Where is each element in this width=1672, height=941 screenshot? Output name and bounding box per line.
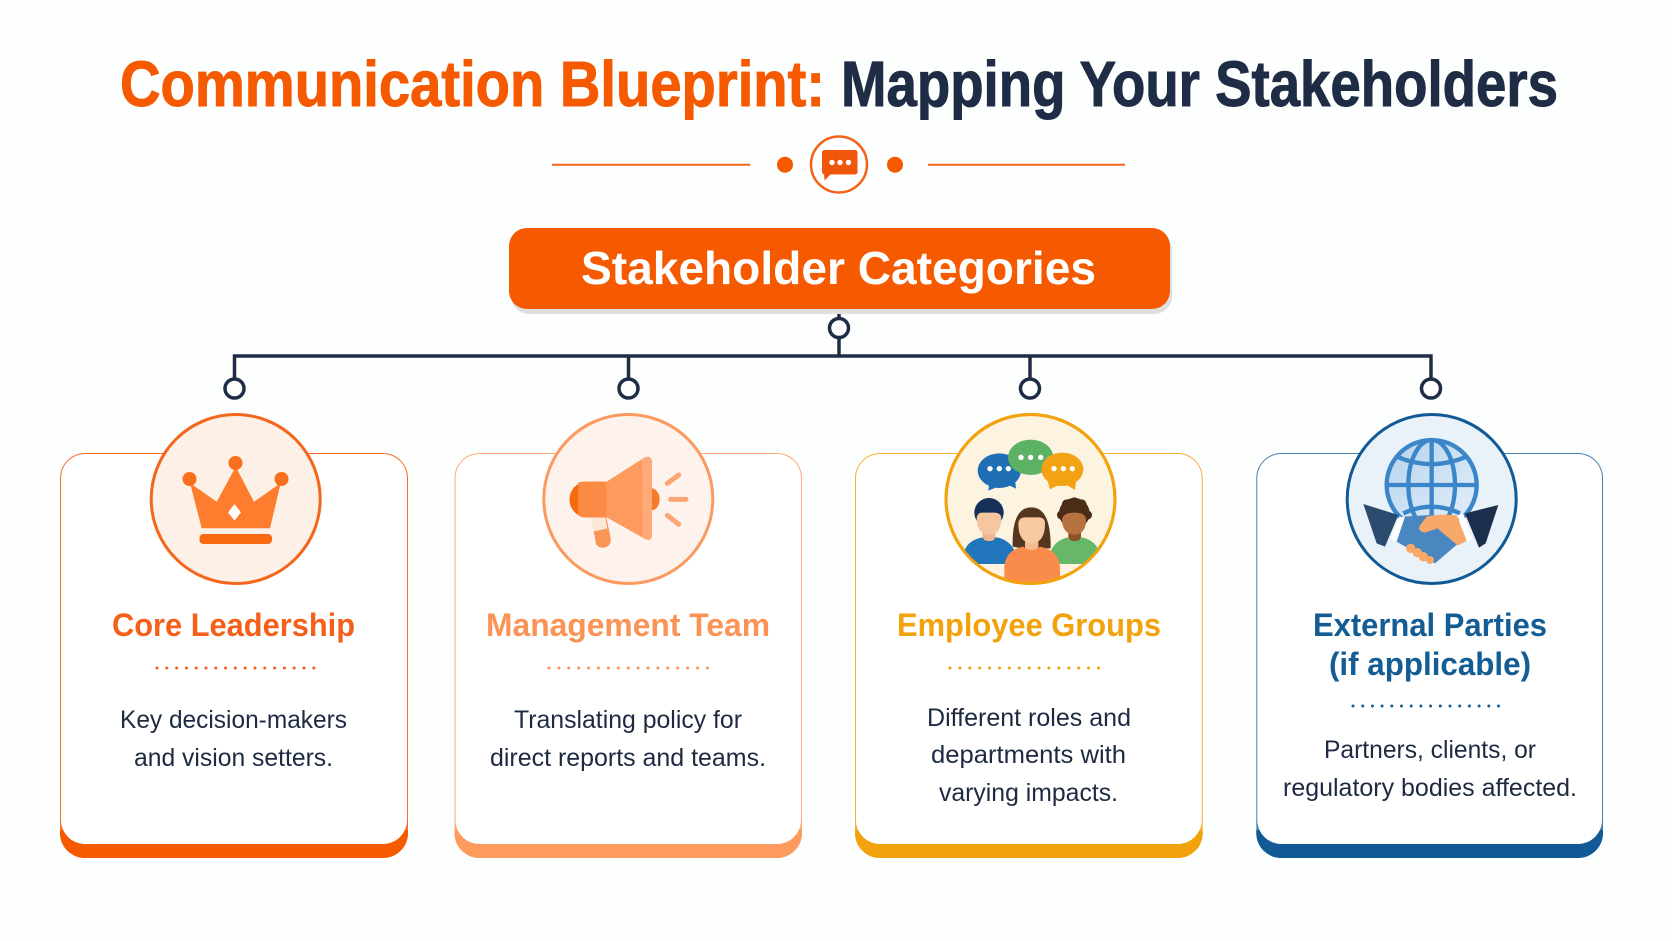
title: Mapping Your Stakeholders <box>841 48 1558 120</box>
title: Communication Blueprint: <box>120 48 825 120</box>
icon: globe and handshake <box>1347 414 1516 584</box>
description: regulatory bodies affected. <box>1283 774 1577 802</box>
description: Translating policy for <box>514 706 742 734</box>
panel: Employee Groups <box>855 414 1203 858</box>
panel: Management Team <box>454 414 802 858</box>
banner: Stakeholder Categories <box>509 228 1172 314</box>
description: Key decision-makers <box>120 706 347 734</box>
description: and vision setters. <box>134 744 333 772</box>
banner: Stakeholder Categories: Stakeholder Categories <box>581 242 1096 294</box>
description: direct reports and teams. <box>490 744 766 772</box>
description <box>1283 736 1577 802</box>
description <box>927 704 1131 807</box>
description: departments with <box>931 741 1126 769</box>
dotted divider <box>157 666 314 670</box>
dotted divider <box>1353 704 1508 708</box>
dotted divider <box>549 666 708 670</box>
description: Different roles and <box>927 704 1131 732</box>
heading: Management Team <box>486 607 770 643</box>
heading: Employee Groups <box>897 607 1161 643</box>
description <box>490 706 766 772</box>
description: varying impacts. <box>939 779 1118 807</box>
description: Partners, clients, or <box>1324 736 1536 764</box>
heading <box>1313 607 1547 682</box>
heading: Core Leadership <box>112 607 355 643</box>
title divider with chat icon <box>552 136 1125 192</box>
panel: External Parties <box>1256 414 1603 858</box>
icon: crown <box>151 414 320 584</box>
heading: External Parties <box>1313 607 1547 643</box>
title <box>120 48 1558 120</box>
dotted divider <box>950 666 1108 670</box>
description <box>120 706 347 772</box>
connector tree <box>225 309 1440 398</box>
icon: megaphone <box>544 414 713 584</box>
heading: (if applicable) <box>1329 646 1531 682</box>
panel: Core Leadership <box>60 414 408 858</box>
icon: people with speech bubbles <box>946 414 1115 587</box>
